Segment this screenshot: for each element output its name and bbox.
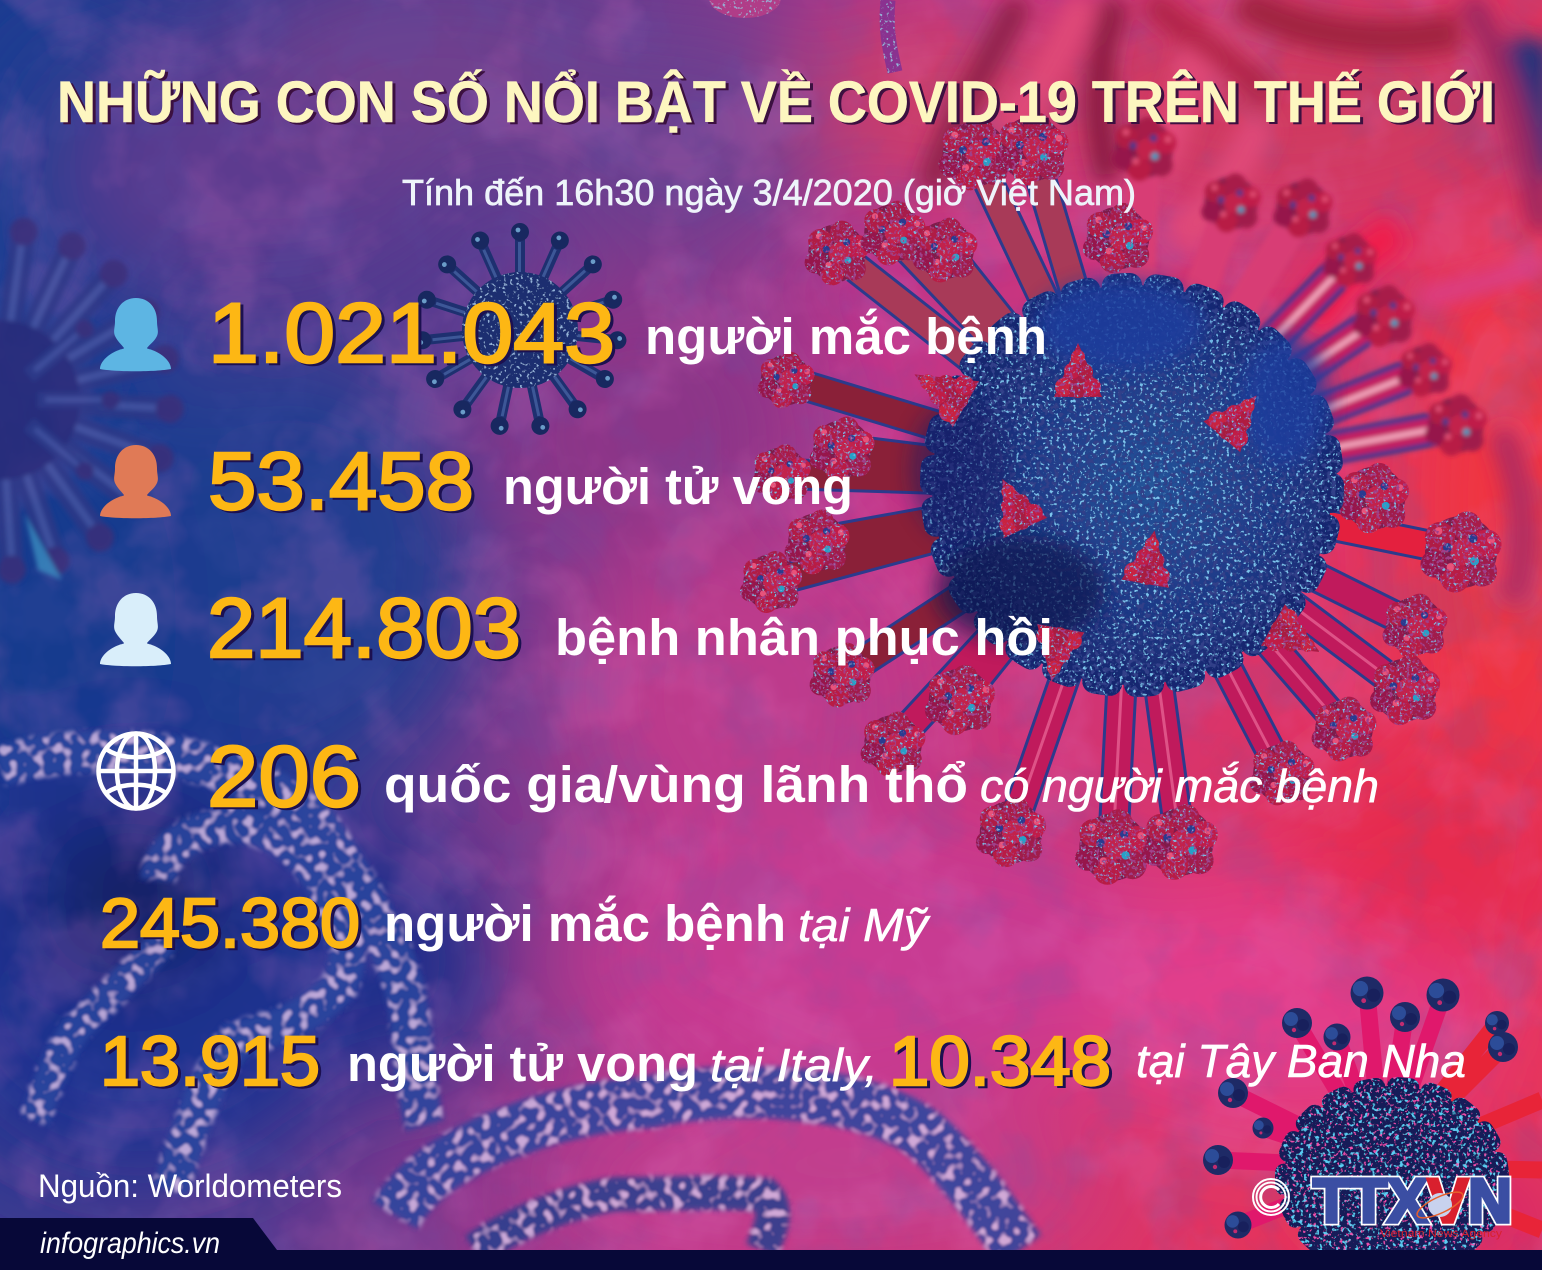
top purple strand bbox=[709, 0, 895, 72]
label: countries: quốc gia/vùng lãnh thổ bbox=[384, 756, 968, 813]
number: Italy deaths: 13.915 bbox=[100, 1022, 320, 1100]
icon: person light bbox=[100, 593, 171, 666]
surface spike heads bbox=[901, 343, 1332, 686]
note: in the US: tại Mỹ bbox=[798, 899, 931, 951]
website: infographics.vn bbox=[40, 1227, 220, 1260]
note: countries: có người mắc bệnh bbox=[980, 760, 1379, 812]
blurred upper-right spikes bbox=[1112, 117, 1487, 485]
left edge virus bbox=[0, 216, 184, 585]
bottom right virus bbox=[1203, 976, 1542, 1270]
icon: person orange bbox=[100, 445, 171, 518]
subtitle: date: Tính đến 16h30 ngày 3/4/2020 (giờ Việt Nam) bbox=[402, 172, 1136, 213]
number: countries: 206 bbox=[207, 729, 361, 825]
spike heads bbox=[740, 113, 1502, 885]
icon: copyright bbox=[1253, 1179, 1289, 1215]
icon: person blue bbox=[100, 298, 171, 371]
virus body bbox=[932, 285, 1332, 685]
number: US cases: 245.380 bbox=[100, 884, 360, 962]
label: recovered: bệnh nhân phục hồi bbox=[555, 609, 1053, 666]
footer band bbox=[0, 1218, 1542, 1270]
small virus behind the first number bbox=[413, 223, 627, 437]
body shading bbox=[910, 280, 1330, 645]
DNA strands bottom left bbox=[0, 751, 1020, 1250]
top right virus strands bbox=[930, 0, 1542, 600]
logo: TTXVN: TTXVN bbox=[1313, 1167, 1512, 1236]
label: deaths: người tử vong bbox=[503, 458, 853, 515]
number: Spain deaths: 10.348 bbox=[889, 1022, 1111, 1100]
source: Nguồn: Worldometers bbox=[38, 1168, 342, 1204]
number: cases: 1.021.043 bbox=[208, 286, 615, 380]
number: deaths: 53.458 bbox=[208, 436, 474, 527]
note: in Spain: tại Tây Ban Nha bbox=[1136, 1035, 1466, 1087]
number: recovered: 214.803 bbox=[207, 581, 521, 675]
logo: TTXVN: TTXVN bbox=[1313, 1167, 1512, 1236]
main coronavirus bbox=[740, 113, 1502, 885]
label: Italy deaths: người tử vong bbox=[347, 1035, 698, 1092]
spike stems bbox=[771, 149, 1461, 847]
label: cases: người mắc bệnh bbox=[645, 307, 1047, 365]
logo: TTXVN: Vietnam News Agency bbox=[1380, 1228, 1503, 1240]
icon: globe bbox=[98, 734, 174, 808]
note: in Italy: tại Italy, bbox=[710, 1039, 878, 1091]
label: US cases: người mắc bệnh bbox=[384, 894, 786, 952]
